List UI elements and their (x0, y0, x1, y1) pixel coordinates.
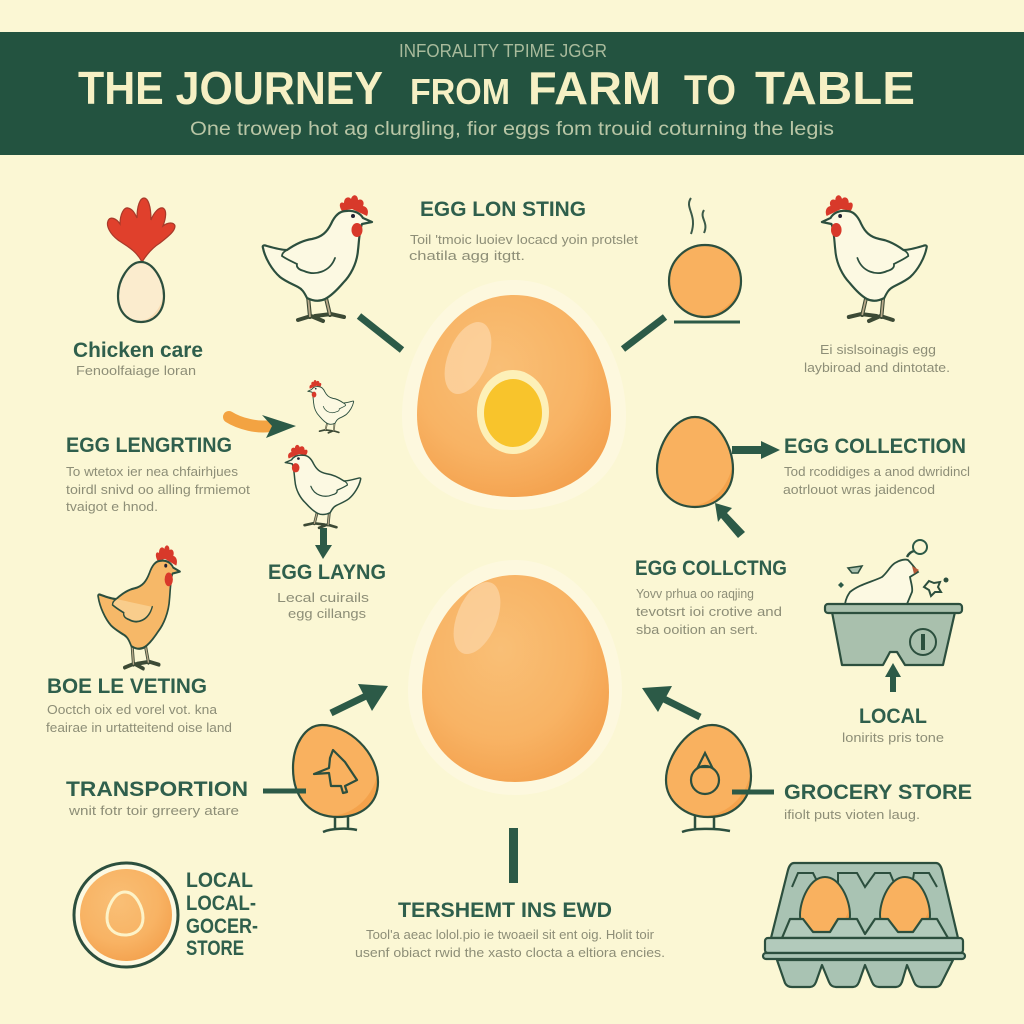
boe le veting text: feairae in urtatteitend oise land (46, 721, 232, 735)
arrow line right (732, 790, 774, 794)
carton bottom cups (777, 960, 953, 987)
tershemt text: TERSHEMT INS EWD (398, 899, 612, 922)
carton front ridges (782, 919, 948, 938)
grocery store text: GROCERY STORE (784, 781, 972, 804)
tershemt text: usenf obiact rwid the xasto clocta a eltiora encies. (355, 946, 665, 960)
egg lon sting text: chatila agg itgtt. (409, 249, 525, 263)
egg lenerting text: tvaigot e hnod. (66, 500, 158, 514)
transportion text (66, 778, 248, 818)
title banner (0, 32, 1024, 155)
egg lon sting text: Toil 'tmoic luoiev locacd yoin protslet (410, 233, 639, 247)
carton eggs (800, 877, 850, 933)
icon: egg with arrows, collection (657, 417, 780, 538)
laying text right: Ei sislsoinagis egg (820, 343, 936, 357)
egg collection text: EGG COLLECTION (784, 435, 966, 458)
chicken care label: Fenoolfaiage loran (76, 364, 196, 378)
yolk (477, 370, 549, 454)
big egg top (402, 280, 626, 510)
banner kicker: INFORALITY TPIME JGGR (399, 41, 607, 61)
arrow: hen down to egg laying (315, 528, 332, 559)
boe le veting text: Ooctch oix ed vorel vot. kna (47, 703, 217, 717)
transportion text: wnit fotr toir grreery atare (68, 804, 239, 818)
arrow: orange curved into small hen (229, 415, 296, 438)
local grocer store text: STORE (186, 937, 244, 960)
local grocer store text: LOCAL (186, 869, 253, 892)
egg laying text: egg cillangs (288, 607, 366, 621)
icon: white hen top left (263, 195, 372, 321)
carton lid (771, 863, 958, 938)
egg laying text: EGG LAYNG (268, 561, 386, 584)
icon: egg carton (763, 863, 965, 987)
carton rim (765, 938, 963, 953)
egg collection text: aotrlouot wras jaidencod (783, 483, 935, 497)
arrow line left (263, 788, 306, 794)
egg lenerting text (66, 434, 251, 514)
egg colling text: Yovv prhua oo raqjing (636, 587, 754, 601)
icon: small hen (308, 380, 354, 433)
tershemt text (355, 899, 665, 960)
transportion text: TRANSPORTION (66, 778, 248, 801)
big egg bottom (408, 560, 622, 795)
icon: chicken comb and egg (107, 198, 175, 322)
egg collection text: Tod rcodidiges a anod dwridincl (784, 465, 970, 479)
arrow: up left to bottom egg (642, 686, 700, 717)
egg colling text: sba ooition an sert. (636, 623, 758, 637)
egg laying text (268, 561, 386, 621)
grocery store text: ifiolt puts vioten laug. (784, 808, 920, 822)
local text: lonirits pris tone (842, 731, 944, 745)
subtitle: One trowep hot ag clurgling, fior eggs fom trouid coturning the legis (190, 118, 834, 140)
arrow: to egg collection (732, 441, 780, 459)
title: FROM (410, 71, 510, 112)
arrow: up right to bottom egg (331, 684, 388, 713)
local grocer store text: GOCER- (186, 915, 258, 938)
icon: egg with drop right (666, 725, 751, 832)
laying text right (804, 343, 950, 375)
icon: white hen top right (822, 195, 927, 321)
tershemt text: Tool'a aeac lolol.pio ie twoaeil sit ent oig. Holit toir (366, 928, 654, 942)
chicken care label: Chicken care (73, 339, 203, 362)
egg colling text: tevotsrt ioi crotive and (636, 605, 782, 619)
egg lenerting text: toirdl snivd oo alling frmiemot (66, 483, 251, 497)
divider arrow bottom (509, 828, 518, 883)
chicken care label (73, 339, 203, 378)
egg colling text (635, 557, 787, 637)
hen orange (98, 545, 180, 669)
title: FARM (528, 62, 661, 114)
arrow: up to tray (885, 663, 901, 692)
icon: steaming egg (669, 198, 741, 322)
egg colling text: EGG COLLCTNG (635, 557, 787, 580)
egg collection text (783, 435, 970, 497)
icon: egg with bird left (293, 725, 378, 832)
icon: tray with hen silhouette (825, 540, 962, 665)
laying text right: laybiroad and dintotate. (804, 361, 950, 375)
title: THE JOURNEY (78, 62, 383, 114)
title: TO (684, 66, 736, 113)
title (78, 62, 915, 114)
egg lon sting text: EGG LON STING (420, 198, 586, 221)
boe le veting text: BOE LE VETING (47, 675, 207, 698)
arrow: egg to centre (623, 317, 665, 349)
egg lon sting text (409, 198, 639, 263)
icon: egg in circle (74, 863, 178, 967)
icon: middle hen (285, 445, 361, 528)
egg laying text: Lecal cuirails (277, 591, 369, 605)
title: TABLE (755, 62, 915, 114)
egg lenerting text: To wtetox ier nea chfairhjues (66, 465, 238, 479)
local grocer store text: LOCAL- (186, 892, 256, 915)
boe le veting text (46, 675, 232, 735)
local grocer store text (186, 869, 258, 960)
local text: LOCAL (859, 705, 927, 728)
grocery store text (784, 781, 972, 822)
local text (842, 705, 944, 745)
arrow: up into egg (715, 503, 745, 538)
egg lenerting text: EGG LENGRTING (66, 434, 232, 457)
arrow: hen to egg (359, 316, 402, 350)
